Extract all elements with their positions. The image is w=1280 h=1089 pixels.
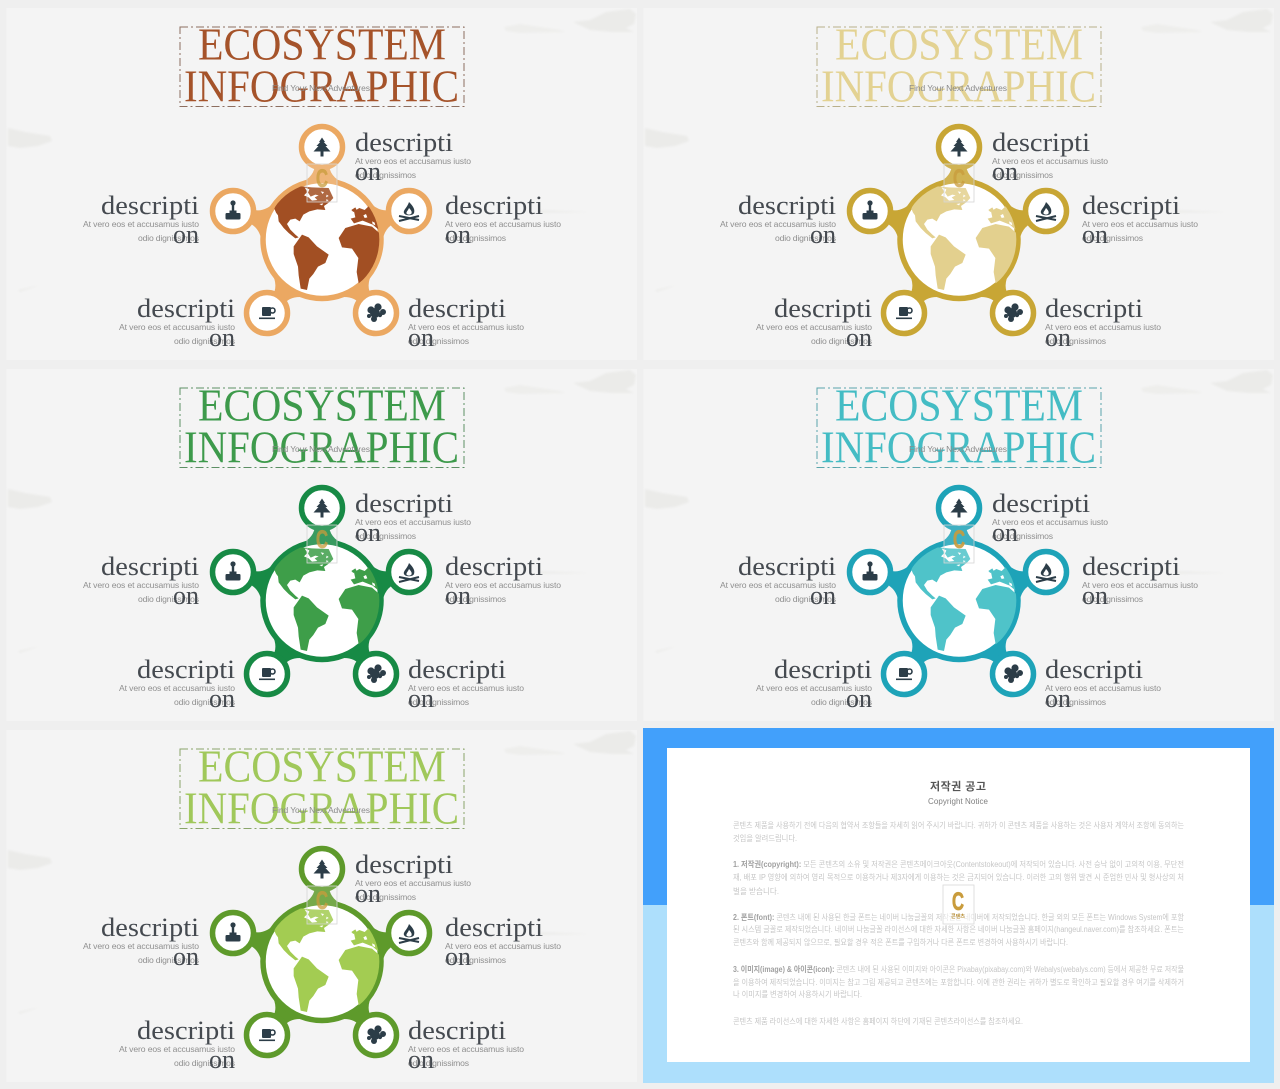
label: lower right (408, 294, 524, 352)
label: right (1082, 191, 1198, 249)
watermark (944, 164, 974, 202)
label: top: odio dignissimos (355, 531, 416, 541)
label: top: on (355, 157, 381, 186)
label: right: odio dignissimos (1082, 233, 1143, 243)
label: lower left (119, 294, 235, 352)
label: left: At vero eos et accusamus iusto (720, 219, 836, 229)
panel: copyright notice (643, 728, 1274, 1083)
label: lower right: odio dignissimos (408, 697, 469, 707)
label: lower left: odio dignissimos (174, 336, 235, 346)
label: right: on (1082, 581, 1108, 610)
world map (274, 547, 383, 651)
label: left: odio dignissimos (138, 955, 199, 965)
label: lower right (408, 655, 524, 713)
section 3: image and icon: 을 이용하여 제작되었습니다. 이미지는 참고 그림 제공되고 콘텐츠에는 포함합니다. 이에 관한 권리는 귀하가 별도로 확인하고 필요할 경우 여기를 삭제하거 (733, 977, 1184, 987)
label: lower right: At vero eos et accusamus iusto (1045, 322, 1161, 332)
watermark: 콘텐츠 (951, 913, 965, 920)
label: left: At vero eos et accusamus iusto (83, 941, 199, 951)
globe ring with satellites (212, 848, 430, 1056)
label: right: on (445, 942, 471, 971)
title frame (817, 27, 1101, 106)
label: top (992, 128, 1108, 186)
label: right: At vero eos et accusamus iusto (1082, 580, 1198, 590)
label: lower left: descripti (137, 655, 235, 684)
label: lower right: At vero eos et accusamus iusto (408, 683, 524, 693)
title: ECOSYSTEM (835, 20, 1083, 70)
world map (911, 547, 1020, 651)
section 1: copyright (733, 859, 1184, 896)
label: right: on (1082, 220, 1108, 249)
title frame (180, 749, 464, 828)
label: right: odio dignissimos (1082, 594, 1143, 604)
label: top: descripti (992, 128, 1090, 157)
label: lower right: At vero eos et accusamus iusto (408, 322, 524, 332)
label: lower left: descripti (137, 294, 235, 323)
label: top: At vero eos et accusamus iusto (355, 517, 471, 527)
slide background (6, 8, 637, 360)
label: top: on (355, 879, 381, 908)
label: right: odio dignissimos (445, 955, 506, 965)
label: lower right (1045, 294, 1161, 352)
title: INFOGRAPHIC (184, 422, 459, 472)
label: lower right: on (408, 1045, 434, 1074)
watermark (943, 885, 974, 924)
watermark (307, 164, 337, 202)
title: ECOSYSTEM (198, 742, 446, 792)
watermark (307, 525, 337, 563)
icons: tree, fire, puzzle, cup, stamp (862, 498, 1056, 683)
subtitle: Find Your Next Adventures (909, 444, 1007, 454)
label: lower right: on (1045, 684, 1071, 713)
label: lower right: descripti (408, 294, 506, 323)
label: right: descripti (445, 913, 543, 942)
section 3: image and icon: 3. 이미지(image) & 아이콘(icon): 콘텐츠 내에 된 사용된 이미지와 아이콘은 Pixabay(pixabay.com)와 Webalys(webalys.com) 등에서 제공한 무료 저작물 (733, 964, 1184, 974)
label: lower right: on (1045, 323, 1071, 352)
label: right: descripti (1082, 191, 1180, 220)
title: ECOSYSTEM (198, 20, 446, 70)
label: lower right: odio dignissimos (1045, 697, 1106, 707)
label: lower left: on (846, 684, 872, 713)
label: lower left: descripti (774, 294, 872, 323)
closing line: 콘텐츠 제품 라이선스에 대한 자세한 사항은 홈페이지 하단에 기재된 콘텐츠라이선스를 참조하세요. (733, 1016, 1023, 1026)
label: left: descripti (101, 552, 199, 581)
label: left: odio dignissimos (775, 594, 836, 604)
title: ECOSYSTEM (198, 380, 446, 430)
label: top: on (992, 518, 1018, 547)
title: INFOGRAPHIC (184, 784, 459, 834)
label: right: At vero eos et accusamus iusto (445, 941, 561, 951)
slide: green ecosystem (6, 369, 637, 721)
label: top: At vero eos et accusamus iusto (992, 156, 1108, 166)
globe ring with satellites (850, 488, 1066, 694)
section 2: font (733, 912, 1185, 947)
world map (911, 186, 1020, 290)
label: left: descripti (101, 191, 199, 220)
label: right: At vero eos et accusamus iusto (445, 580, 561, 590)
section 2: font: 2. 폰트(font): 콘텐츠 내에 된 사용된 한글 폰트는 네이버 나눔글꼴의 저작권은 네이버에 저작되었습니다. 한글 외의 모든 폰트는 Windows System에 포함 (733, 912, 1185, 922)
slide background (644, 8, 1274, 360)
label: lower right: odio dignissimos (408, 1058, 469, 1068)
label: top: At vero eos et accusamus iusto (355, 156, 471, 166)
label: left (720, 191, 836, 249)
label: left (720, 552, 836, 610)
label: lower left: odio dignissimos (811, 336, 872, 346)
label: right: descripti (445, 191, 543, 220)
label: top: odio dignissimos (355, 170, 416, 180)
label: lower right: descripti (1045, 655, 1143, 684)
label: top: At vero eos et accusamus iusto (992, 517, 1108, 527)
label: lower right: on (408, 684, 434, 713)
label: top (992, 489, 1108, 547)
label: right: At vero eos et accusamus iusto (1082, 219, 1198, 229)
label: lower right: At vero eos et accusamus iusto (408, 1044, 524, 1054)
section 1: copyright: 재, 배포 IP 영향에 의하여 영리 목적으로 이용하거나 제3자에게 이용하는 것은 금지되어 있습니다. 이러한 고의 행위 발견 시 준엄한 민사 및 형사상의 처 (733, 872, 1184, 882)
label: lower left: on (209, 323, 235, 352)
title (184, 742, 459, 834)
notice subheading: Copyright Notice (928, 797, 989, 806)
label: top: descripti (355, 850, 453, 879)
label: top: descripti (992, 489, 1090, 518)
white sheet (667, 748, 1250, 1062)
label: lower left: on (846, 323, 872, 352)
globe ring with satellites (850, 126, 1066, 334)
label: left: on (810, 581, 836, 610)
icons: tree, fire, puzzle, cup, stamp (862, 138, 1056, 322)
label: left: At vero eos et accusamus iusto (720, 580, 836, 590)
label: lower left: At vero eos et accusamus iusto (119, 1044, 235, 1054)
label: right: odio dignissimos (445, 594, 506, 604)
label: right: descripti (445, 552, 543, 581)
title (184, 20, 459, 112)
label: lower left: descripti (137, 1016, 235, 1045)
label: top: odio dignissimos (992, 531, 1053, 541)
label: lower left: At vero eos et accusamus iusto (756, 683, 872, 693)
title frame (817, 388, 1101, 468)
slide: teal ecosystem (644, 369, 1274, 721)
title (821, 20, 1096, 112)
label: right: on (445, 581, 471, 610)
label: top (355, 850, 471, 908)
icons: tree, fire, puzzle, cup, stamp (226, 860, 419, 1044)
label: left (83, 913, 199, 971)
slide: brown ecosystem (6, 8, 637, 360)
label: lower left (119, 1016, 235, 1074)
label: top: on (355, 518, 381, 547)
label: lower right: odio dignissimos (1045, 336, 1106, 346)
label: left: on (173, 581, 199, 610)
slide background (6, 369, 637, 721)
title: INFOGRAPHIC (184, 62, 459, 112)
section 1: copyright: 벌을 받습니다. (733, 886, 779, 896)
label: lower right: descripti (408, 655, 506, 684)
watermark: C (316, 165, 328, 193)
title (821, 380, 1096, 472)
globe ring with satellites (212, 126, 430, 334)
title: INFOGRAPHIC (821, 62, 1096, 112)
slide: gold ecosystem (644, 8, 1274, 360)
title: ECOSYSTEM (835, 380, 1083, 430)
label: lower right (1045, 655, 1161, 713)
label: left: descripti (738, 552, 836, 581)
label: lower left: odio dignissimos (174, 697, 235, 707)
label: lower left: At vero eos et accusamus iusto (119, 683, 235, 693)
label: left: on (810, 220, 836, 249)
blue backdrop (643, 728, 1274, 1083)
label: left (83, 552, 199, 610)
watermark: C (952, 888, 964, 916)
watermark: C (316, 526, 328, 554)
section 3: image and icon: 나 이미지를 변경하여 사용하시기 바랍니다. (733, 989, 862, 999)
label: left: odio dignissimos (138, 594, 199, 604)
label: right: odio dignissimos (445, 233, 506, 243)
label: left: At vero eos et accusamus iusto (83, 580, 199, 590)
label: lower left: odio dignissimos (174, 1058, 235, 1068)
label: right: At vero eos et accusamus iusto (445, 219, 561, 229)
intro paragraph: 콘텐츠 제품을 사용하기 전에 다음의 협약서 조항들을 자세히 읽어 주시기 바랍니다. 귀하가 이 콘텐츠 제품을 사용하는 것은 사용자 계약서 조항에 동의하는 (733, 820, 1184, 830)
label: lower left: At vero eos et accusamus iusto (119, 322, 235, 332)
label: right (1082, 552, 1198, 610)
notice heading: 저작권 공고 (930, 779, 986, 793)
title (184, 380, 459, 472)
subtitle: Find Your Next Adventures (272, 805, 370, 815)
title frame (180, 388, 464, 468)
subtitle: Find Your Next Adventures (272, 444, 370, 454)
label: lower left (119, 655, 235, 713)
label: lower left: on (209, 1045, 235, 1074)
label: top: odio dignissimos (355, 892, 416, 902)
watermark (944, 525, 974, 563)
label: right (445, 552, 561, 610)
title: INFOGRAPHIC (821, 422, 1096, 472)
watermark: C (953, 526, 965, 554)
label: lower right (408, 1016, 524, 1074)
label: lower right: At vero eos et accusamus iusto (1045, 683, 1161, 693)
intro paragraph: 것임을 알려드립니다. (733, 833, 797, 843)
label: left (83, 191, 199, 249)
label: right (445, 913, 561, 971)
label: lower right: descripti (1045, 294, 1143, 323)
icons: tree, fire, puzzle, cup, stamp (226, 498, 419, 683)
label: left: on (173, 220, 199, 249)
label: lower left: odio dignissimos (811, 697, 872, 707)
section 2: font: 콘텐츠와 함께 제공되지 않으므로, 필요할 경우 적은 폰트를 구입하거나 다른 폰트로 변경하여 사용하시기 바랍니다. (733, 937, 1068, 947)
section 1: copyright: 1. 저작권(copyright): 모든 콘텐츠의 소유 및 저작권은 콘텐츠메이크아웃(Contentstokeout)에 저작되어 있습니다. 사전 승낙 없이 고의적 이용, 무단전 (733, 859, 1184, 869)
section 3: image and icon (733, 964, 1184, 999)
label: lower left: on (209, 684, 235, 713)
label: left: odio dignissimos (138, 233, 199, 243)
slide background (644, 369, 1274, 721)
label: left: descripti (101, 913, 199, 942)
label: right (445, 191, 561, 249)
world map (274, 186, 383, 290)
label: top (355, 489, 471, 547)
label: top: on (992, 157, 1018, 186)
label: top: At vero eos et accusamus iusto (355, 878, 471, 888)
subtitle: Find Your Next Adventures (909, 83, 1007, 93)
world map (274, 908, 383, 1012)
label: top: descripti (355, 128, 453, 157)
label: lower right: descripti (408, 1016, 506, 1045)
title frame (180, 27, 464, 106)
globe ring with satellites (212, 488, 430, 694)
label: lower left: At vero eos et accusamus iusto (756, 322, 872, 332)
label: top: descripti (355, 489, 453, 518)
label: top: odio dignissimos (992, 170, 1053, 180)
label: lower left (756, 655, 872, 713)
label: left: At vero eos et accusamus iusto (83, 219, 199, 229)
label: right: on (445, 220, 471, 249)
intro paragraph (733, 820, 1184, 843)
label: lower left: descripti (774, 655, 872, 684)
label: lower left (756, 294, 872, 352)
section 2: font: 된 시스템 글꼴로 제작되었습니다. 네이버 나눔글꼴 라이선스에 대한 자세한 사항은 네이버 나눔글꼴 홈페이지(hangeul.naver.com)를 참조하세요. 폰트는 (733, 924, 1184, 934)
label: left: odio dignissimos (775, 233, 836, 243)
slide: lime ecosystem (6, 730, 637, 1082)
watermark: C (316, 887, 328, 915)
icons: tree, fire, puzzle, cup, stamp (226, 138, 419, 322)
label: left: on (173, 942, 199, 971)
label: left: descripti (738, 191, 836, 220)
subtitle: Find Your Next Adventures (272, 83, 370, 93)
slide background (6, 730, 637, 1082)
label: lower right: on (408, 323, 434, 352)
watermark (307, 886, 337, 924)
label: lower right: odio dignissimos (408, 336, 469, 346)
label: top (355, 128, 471, 186)
watermark: C (953, 165, 965, 193)
label: right: descripti (1082, 552, 1180, 581)
